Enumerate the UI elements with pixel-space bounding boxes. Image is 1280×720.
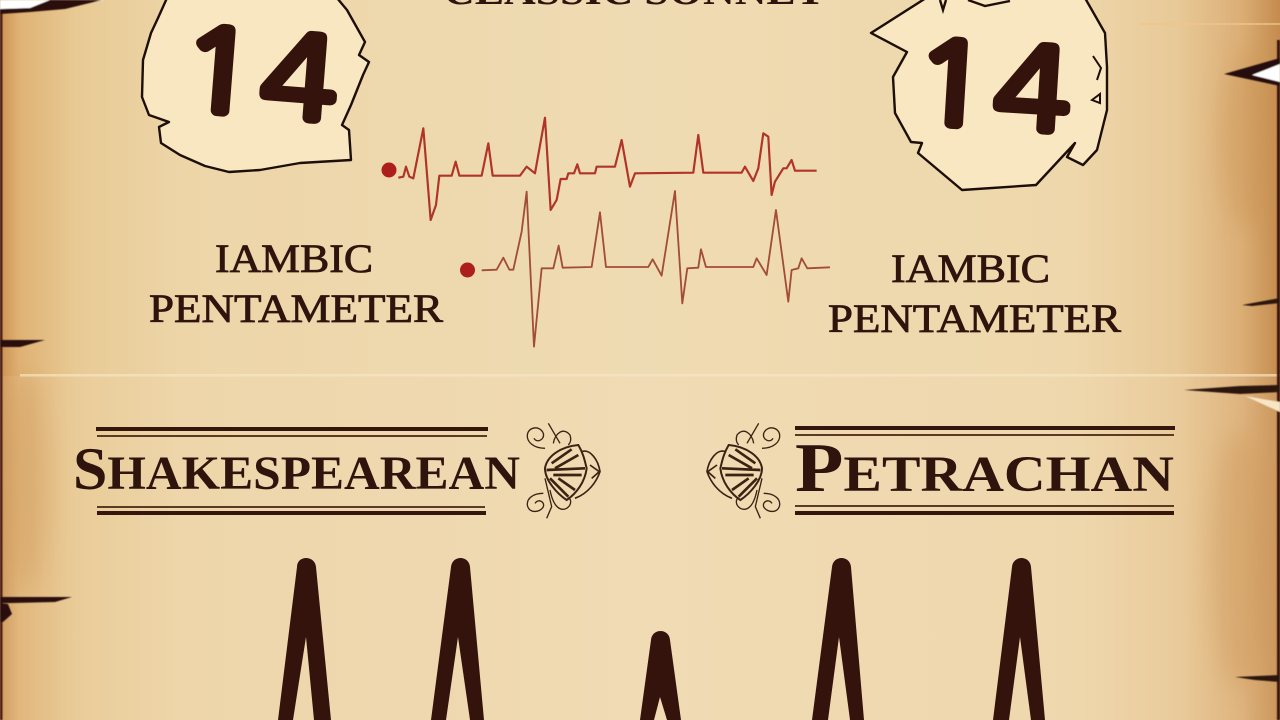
heading: Petrachan: PETRACHAN [795,430,1174,507]
number: right 14: 14 [911,27,1078,148]
stress peaks chart [278,558,1045,720]
right torn note with number 14 [871,0,1107,190]
label: right iambic pentameter [828,246,1121,341]
heartbeat line 2 [460,191,830,347]
peak 5 [993,558,1045,720]
label: left iambic pentameter: PENTAMETER [149,286,443,331]
ornament: left flourish [527,423,600,518]
heading: Shakespearean: SHAKESPEAREAN [73,436,520,502]
peak 4 [812,558,864,720]
left torn note with number 14 [142,0,369,172]
peak 3 [640,631,681,720]
label: left iambic pentameter [149,236,443,331]
ornament: right flourish [707,423,780,518]
label: right iambic pentameter: PENTAMETER [828,296,1121,341]
peak 1 [278,558,331,720]
label: right iambic pentameter: IAMBIC [891,246,1050,291]
number: left 14: 14 [177,13,346,138]
label: left iambic pentameter: IAMBIC [215,236,373,281]
peak 2 [431,558,484,720]
heartbeat line 1 [382,118,817,220]
